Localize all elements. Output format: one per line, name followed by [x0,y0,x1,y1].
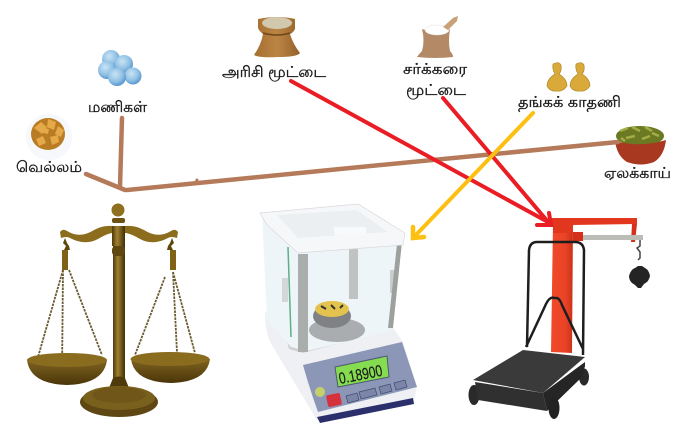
icon: sugar sack [417,16,458,58]
icon: rice sack [254,17,300,57]
arrows: brown connectors [86,118,618,190]
hook and weight [637,240,640,260]
weighing chamber floor [277,307,388,353]
icon: platform scale [468,218,650,419]
label: rice sack: அரிசி மூட்டை [222,64,326,81]
label: jaggery: வெல்லம் [16,159,82,176]
icon: beads [98,50,142,86]
chamber glass [262,213,398,351]
control panel [303,342,417,412]
icon: jaggery [26,114,72,160]
icon: precision balance: 0.18900 [338,363,384,388]
label: sugar sack line 2: மூட்டை [406,82,466,99]
top frame [260,204,405,253]
scale beam and column [551,224,573,353]
icon: precision balance [260,204,417,423]
display [335,356,389,387]
platform [473,350,585,393]
label: cardamom: ஏலக்காய் [604,165,671,182]
label: gold earrings: தங்கக் காதணி [518,94,621,111]
weighing pan [309,318,365,342]
wheels back [579,368,589,386]
arrows: red connectors to platform scale [291,81,551,225]
arrow: yellow connector to precision balance [413,113,533,238]
icon: brass balance [27,204,210,417]
handle frame [526,242,584,355]
balance body [265,308,417,420]
label: beads: மணிகள் [88,99,147,116]
label: sugar sack line 1: சர்க்கரை [403,61,467,78]
icon: cardamom bowl [615,126,666,164]
icon: gold earrings [547,63,590,91]
